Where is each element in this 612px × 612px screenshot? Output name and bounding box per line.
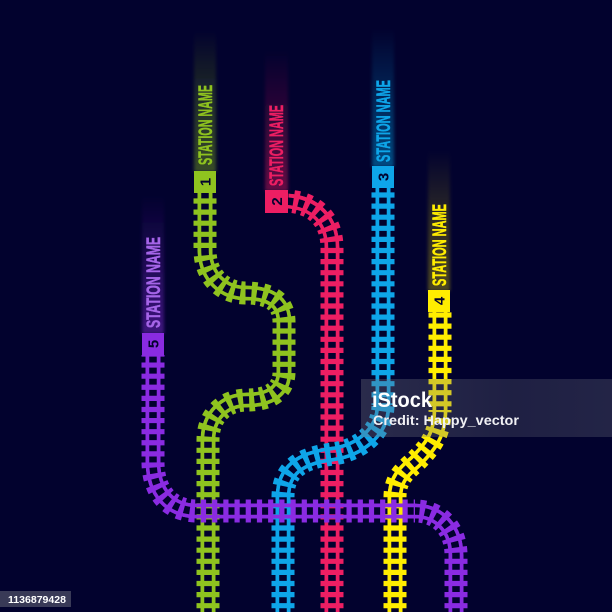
station 5 label: STATION NAME <box>144 237 165 328</box>
station 2 label: 2 <box>269 197 286 206</box>
watermark credit panel: iStock <box>372 389 432 412</box>
track 4: yellow <box>395 312 440 612</box>
station 2 label: STATION NAME <box>267 105 288 186</box>
station 1 label: 1 <box>198 178 214 186</box>
image id tag: 1136879428 <box>8 594 66 606</box>
station 1 label: STATION NAME <box>196 85 217 165</box>
watermark credit panel: Credit: Happy_vector <box>373 413 520 428</box>
station 4 label: 4 <box>432 296 448 305</box>
station 5 label: 5 <box>146 340 162 348</box>
image id tag <box>0 591 71 607</box>
track 3: blue <box>283 188 383 612</box>
track 1: green <box>205 193 284 612</box>
station 3 label: 3 <box>376 173 392 181</box>
watermark credit panel <box>361 379 612 437</box>
track 5: purple <box>153 355 456 612</box>
track 2: pink <box>288 201 332 612</box>
station 3 label: STATION NAME <box>374 80 395 162</box>
station 4 label: STATION NAME <box>430 204 451 286</box>
